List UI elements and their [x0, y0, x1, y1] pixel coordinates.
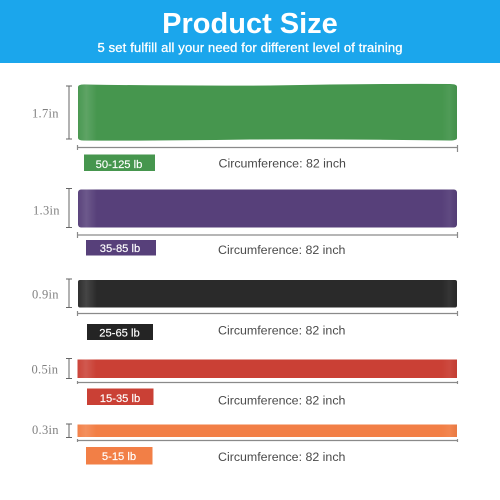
circumference text: Circumference: 82 inch — [218, 324, 346, 338]
band: green — [78, 84, 457, 141]
height marker 1.7in — [32, 86, 72, 139]
height marker 1.3in: 1.3in — [33, 204, 60, 218]
header banner — [0, 0, 500, 63]
weight label 5-15 lb — [86, 447, 152, 464]
panel: green band — [32, 84, 458, 171]
panel: purple band — [33, 188, 458, 257]
weight label 5-15 lb: 5-15 lb — [102, 451, 136, 463]
height marker 0.5in: 0.5in — [32, 362, 59, 376]
circumference line — [78, 381, 458, 384]
height marker 0.3in: 0.3in — [32, 423, 59, 437]
circumference line — [78, 232, 458, 238]
height marker 0.9in — [32, 279, 72, 308]
circumference line — [78, 439, 458, 442]
circumference line — [78, 145, 458, 152]
band: purple — [78, 190, 457, 228]
height marker 0.9in: 0.9in — [32, 288, 59, 302]
weight label 35-85 lb — [86, 240, 156, 256]
circumference text: Circumference: 82 inch — [218, 243, 346, 257]
weight label 35-85 lb: 35-85 lb — [100, 243, 140, 255]
weight label 15-35 lb — [87, 388, 154, 405]
height marker 0.3in — [32, 423, 72, 438]
title: Product Size — [162, 8, 338, 40]
panel: black band — [32, 279, 458, 340]
height marker 1.3in — [33, 188, 72, 228]
circumference line — [78, 311, 458, 316]
panel: red band — [32, 358, 458, 408]
circumference text: Circumference: 82 inch — [218, 394, 346, 408]
band: red — [78, 360, 457, 378]
band: black — [78, 280, 457, 308]
weight label 15-35 lb: 15-35 lb — [100, 393, 140, 405]
panel: orange band — [32, 423, 458, 464]
height marker 0.5in — [32, 358, 72, 378]
circumference text: Circumference: 82 inch — [218, 450, 346, 464]
subtitle: 5 set fulfill all your need for different level of training — [98, 40, 402, 55]
circumference text: Circumference: 82 inch — [218, 156, 346, 170]
weight label 50-125 lb: 50-125 lb — [96, 159, 142, 171]
height marker 1.7in: 1.7in — [32, 106, 59, 120]
weight label 25-65 lb — [87, 324, 153, 340]
band: orange — [78, 424, 457, 437]
weight label 25-65 lb: 25-65 lb — [99, 328, 140, 340]
weight label 50-125 lb — [84, 154, 155, 171]
